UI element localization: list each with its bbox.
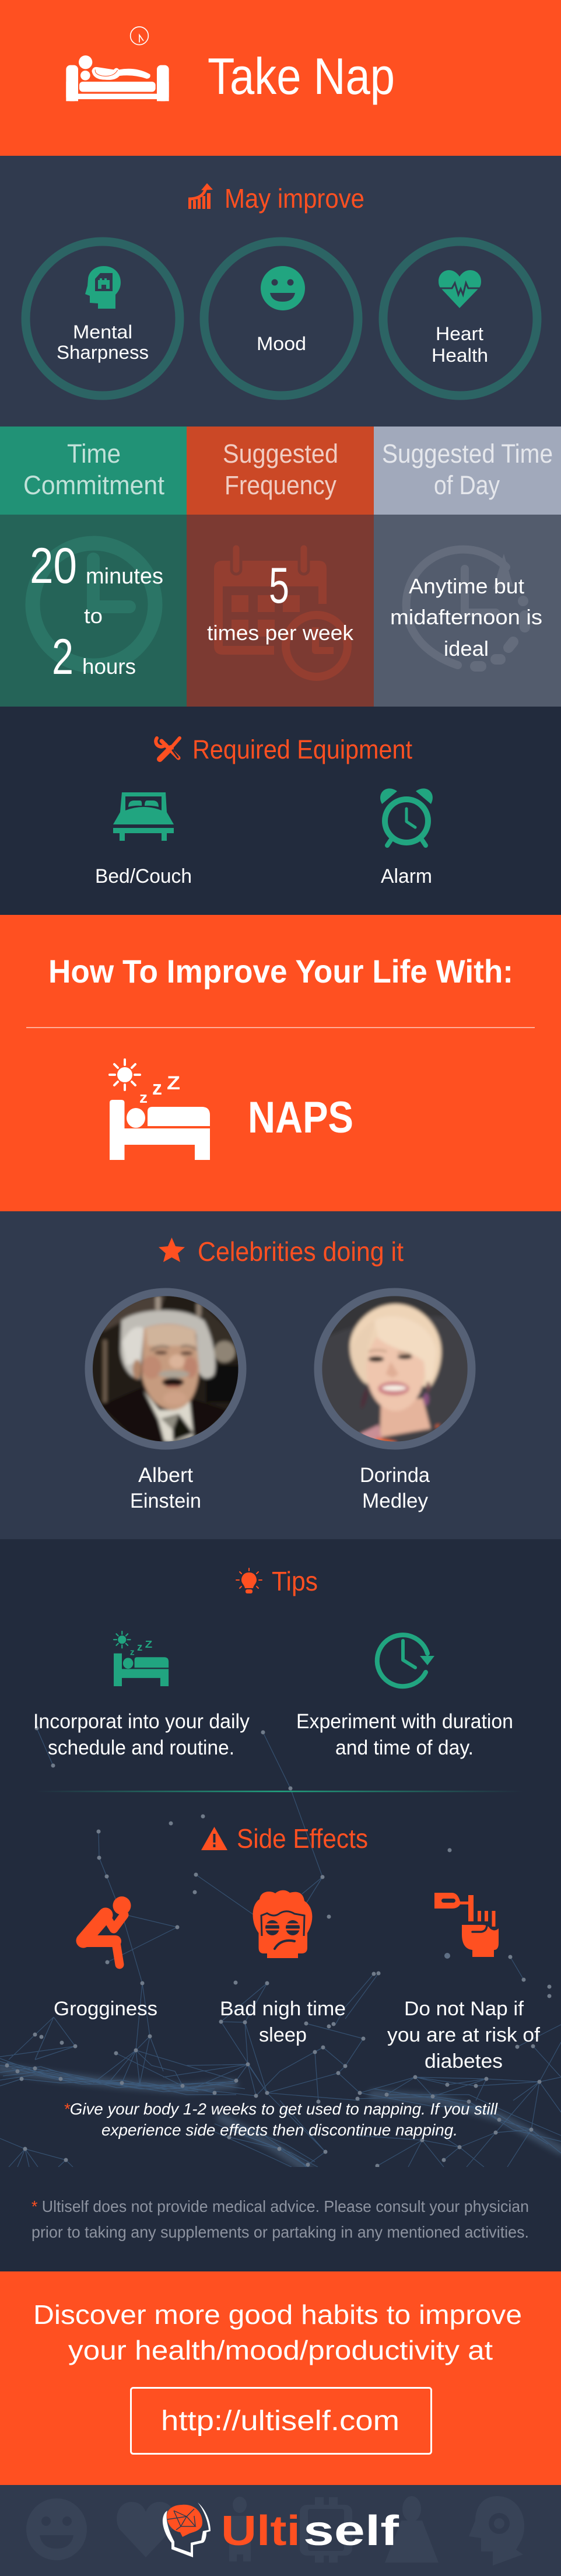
value: anytime but midafternoon is ideal: ideal xyxy=(444,637,489,660)
heading: celebrities doing it: Celebrities doing it xyxy=(198,1236,404,1267)
icon: sleeping in bed with sun: Z xyxy=(167,1072,180,1093)
icon: tools xyxy=(156,738,180,759)
background habit icons xyxy=(26,2496,524,2565)
panel: time commitment: Time xyxy=(67,439,121,469)
panel: suggested time of day xyxy=(374,427,561,707)
icon: light bulb xyxy=(236,1568,262,1593)
panel: may improve xyxy=(0,156,561,427)
label: grogginess: Grogginess xyxy=(54,1998,157,2020)
icon: star xyxy=(159,1238,185,1262)
heading: naps: NAPS xyxy=(248,1093,353,1142)
note: side effect advice xyxy=(64,2100,498,2139)
value: 20 minutes to 2 hours: 2 xyxy=(52,629,73,685)
value: 5 times per week: 5 xyxy=(269,558,289,614)
panel: time commitment: Commitment xyxy=(23,470,164,500)
icon: growth chart xyxy=(188,183,213,209)
icon: sleeping in bed with sun: z xyxy=(152,1077,162,1099)
value: anytime but midafternoon is ideal xyxy=(390,574,542,660)
value: 20 minutes to 2 hours: to xyxy=(84,604,103,628)
heading: discover more good habits: Discover more good habits to improve xyxy=(33,2299,522,2330)
icon: groggy person xyxy=(83,1896,131,1965)
logo: ultiself xyxy=(163,2502,399,2557)
panel: suggested time of day: of Day xyxy=(434,470,500,500)
icon: background calendar xyxy=(214,544,348,677)
heading: tips: Tips xyxy=(272,1566,318,1596)
icon: person napping on bed with clock xyxy=(66,27,169,101)
panel: required equipment xyxy=(0,707,561,915)
value: 20 minutes to 2 hours: minutes xyxy=(86,564,163,589)
panel: call to action xyxy=(0,2271,561,2485)
icon: sleeping in bed xyxy=(114,1631,169,1686)
label: bad night time sleep: Bad nigh time xyxy=(220,1998,346,2020)
heading: may improve: May improve xyxy=(225,183,364,214)
heading: discover more good habits: your health/mood/productivity at xyxy=(68,2335,493,2365)
logo: ultiself: Ulti xyxy=(221,2508,300,2554)
tip: incorporate into routine: Incorporat into your daily xyxy=(33,1710,250,1733)
tip: incorporate into routine xyxy=(33,1710,250,1759)
panel: how to improve your life xyxy=(0,915,561,1211)
disclaimer: * Ultiself does not provide medical advice. Please consult your physician xyxy=(31,2197,529,2215)
disclaimer: prior to taking any supplements or partaking in any mentioned activities. xyxy=(31,2223,529,2241)
title: Take Nap xyxy=(208,47,395,105)
panel: suggested frequency xyxy=(187,427,374,707)
value: 20 minutes to 2 hours: 20 xyxy=(30,538,77,594)
item: mental sharpness: Mental xyxy=(73,321,132,342)
item: mood: Mood xyxy=(257,333,306,354)
icon: sleeping in bed with sun: z xyxy=(139,1089,148,1106)
panel: tips and side effects xyxy=(0,1539,561,2271)
item: mood xyxy=(204,242,358,396)
panel: suggested frequency: Frequency xyxy=(225,470,336,500)
value: anytime but midafternoon is ideal: midafternoon is xyxy=(390,605,542,629)
label: bad night time sleep: sleep xyxy=(259,2024,307,2046)
value: 5 times per week: times per week xyxy=(207,621,354,645)
item: heart health xyxy=(383,242,537,396)
item: mental sharpness: Sharpness xyxy=(57,342,149,363)
icon: sleeping in bed: z xyxy=(137,1641,142,1653)
logo brain mark xyxy=(163,2502,211,2557)
label: albert einstein: Albert xyxy=(138,1464,193,1487)
note: side effect advice: experience side effects then discontinue napping. xyxy=(101,2121,458,2139)
value: anytime but midafternoon is ideal: Anytime but xyxy=(409,574,524,598)
panel: header xyxy=(0,0,561,156)
icon: sleeping in bed with sun xyxy=(110,1060,210,1160)
button: ultiself link xyxy=(131,2388,432,2454)
tip: incorporate into routine: schedule and routine. xyxy=(48,1736,234,1759)
label: alarm: Alarm xyxy=(381,865,432,887)
label: dorinda medley xyxy=(360,1464,430,1512)
icon: clock with arrow xyxy=(377,1635,434,1686)
logo: ultiself: self xyxy=(303,2508,399,2554)
network background xyxy=(0,1728,561,2170)
icon: alarm clock xyxy=(380,788,433,845)
icon: background clock xyxy=(33,543,155,666)
value: 5 times per week xyxy=(207,558,354,645)
icon: tired face xyxy=(253,1890,312,1958)
label: diabetes warning: you are at risk of xyxy=(387,2024,541,2046)
portrait: dorinda medley xyxy=(316,1289,475,1449)
label: diabetes warning: diabetes xyxy=(425,2050,503,2072)
heading: how to improve your life with: How To Improve Your Life With: xyxy=(48,953,513,990)
label: bed/couch: Bed/Couch xyxy=(95,865,192,887)
label: albert einstein: Einstein xyxy=(130,1490,201,1512)
tip: experiment: and time of day. xyxy=(335,1736,474,1759)
note: side effect advice: *Give your body 1-2 weeks to get used to napping. If you still xyxy=(64,2100,498,2118)
icon: sleeping in bed: z xyxy=(130,1648,135,1657)
label: bad night time sleep xyxy=(220,1998,346,2046)
disclaimer xyxy=(31,2197,529,2241)
heading: discover more good habits xyxy=(33,2299,522,2365)
portrait: albert einstein xyxy=(87,1291,245,1449)
icon: bed xyxy=(113,792,174,841)
heading: side effects: Side Effects xyxy=(237,1823,368,1854)
icon: sleeping in bed: Z xyxy=(145,1638,153,1650)
panel: suggested frequency: Suggested xyxy=(223,439,338,469)
button: ultiself link: http://ultiself.com xyxy=(161,2406,399,2437)
panel: celebrities xyxy=(0,1211,561,1539)
label: diabetes warning: Do not Nap if xyxy=(404,1998,524,2020)
item: heart health: Heart xyxy=(436,323,483,344)
label: dorinda medley: Medley xyxy=(362,1490,428,1512)
panel: time commitment xyxy=(0,427,187,707)
value: 20 minutes to 2 hours: hours xyxy=(82,655,136,679)
label: diabetes warning xyxy=(387,1998,541,2072)
tip: experiment xyxy=(296,1710,513,1759)
label: dorinda medley: Dorinda xyxy=(360,1464,430,1487)
heading: required equipment: Required Equipment xyxy=(192,735,412,764)
panel: footer xyxy=(0,2485,561,2576)
item: mental sharpness xyxy=(26,242,180,396)
icon: warning triangle xyxy=(201,1827,227,1850)
icon: hand holding insulin bottle xyxy=(434,1893,499,1957)
value: 20 minutes to 2 hours xyxy=(30,538,163,685)
icon: background history clock xyxy=(406,550,525,666)
label: albert einstein xyxy=(130,1464,201,1512)
item: heart health: Health xyxy=(432,345,488,366)
tip: experiment: Experiment with duration xyxy=(296,1710,513,1733)
